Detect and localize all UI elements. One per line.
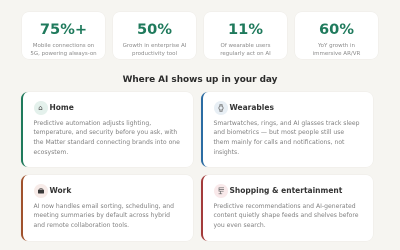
home text: Predictive automation adjusts lighting,: [34, 120, 151, 126]
stat card: 60%: [295, 12, 378, 59]
stat card: 60%: 60%: [319, 20, 354, 38]
home text: [34, 120, 180, 156]
stat card: 75%+: Mobile connections on: [33, 43, 94, 49]
wearables text: and biometrics — but most people still use: [214, 129, 344, 136]
stat card: 50%: Growth in enterprise AI: [123, 43, 186, 49]
stat card: 75%+: 5G, powering always-on: [30, 51, 97, 57]
stat card: 11%: Of wearable users: [221, 43, 270, 49]
stat card: 60%: YoY growth in: [318, 43, 355, 49]
shopping title: Shopping & entertainment: [230, 186, 342, 195]
icon: cart: [214, 184, 228, 198]
stat card: 11%: [204, 12, 287, 59]
wearables text: [214, 120, 360, 156]
stat card: 11%: 11%: [228, 20, 263, 38]
icon: briefcase: [34, 184, 48, 198]
panel: wearables: [201, 92, 373, 167]
stat card: 50%: productivity tool: [132, 51, 177, 57]
shopping text: content quietly shape feeds and shelves before: [214, 212, 358, 219]
wearables text: insights.: [214, 149, 239, 156]
stat card: 60%: immersive AR/VR: [313, 51, 360, 57]
stat card: 50%: 50%: [137, 20, 172, 38]
work text: AI now handles email sorting, scheduling, and: [34, 202, 174, 210]
shopping text: you even search.: [214, 222, 266, 229]
work text: meeting summaries by default across hybrid: [34, 212, 170, 219]
icon: home: ⌂: [38, 104, 43, 112]
wearables title: Wearables: [230, 103, 274, 112]
shopping text: [214, 202, 358, 229]
stat card: 75%+: [22, 12, 105, 59]
wearables text: Smartwatches, rings, and AI glasses track sleep: [214, 120, 360, 126]
work title: Work: [50, 186, 71, 195]
panel: work: [21, 175, 193, 241]
icon: watch: [214, 101, 228, 115]
stat card: 50%: [113, 12, 196, 59]
stat card: 75%+: 75%+: [40, 20, 87, 38]
home text: temperature, and security before you ask, with: [34, 129, 177, 136]
wearables text: them mainly for calls and notifications, not: [214, 139, 344, 146]
panel: shopping: [201, 175, 373, 241]
panel: home: [21, 92, 193, 167]
home text: ecosystem.: [34, 149, 68, 156]
icon: home: [34, 101, 48, 115]
heading: Where AI shows up in your day: [123, 74, 277, 84]
shopping text: Predictive recommendations and AI-generated: [214, 202, 356, 210]
work text: and remote collaboration tools.: [34, 222, 129, 229]
home title: Home: [50, 103, 74, 112]
home text: the Matter standard connecting brands into one: [34, 139, 180, 146]
work text: [34, 202, 174, 229]
stat card: 11%: regularly act on AI: [220, 51, 271, 57]
